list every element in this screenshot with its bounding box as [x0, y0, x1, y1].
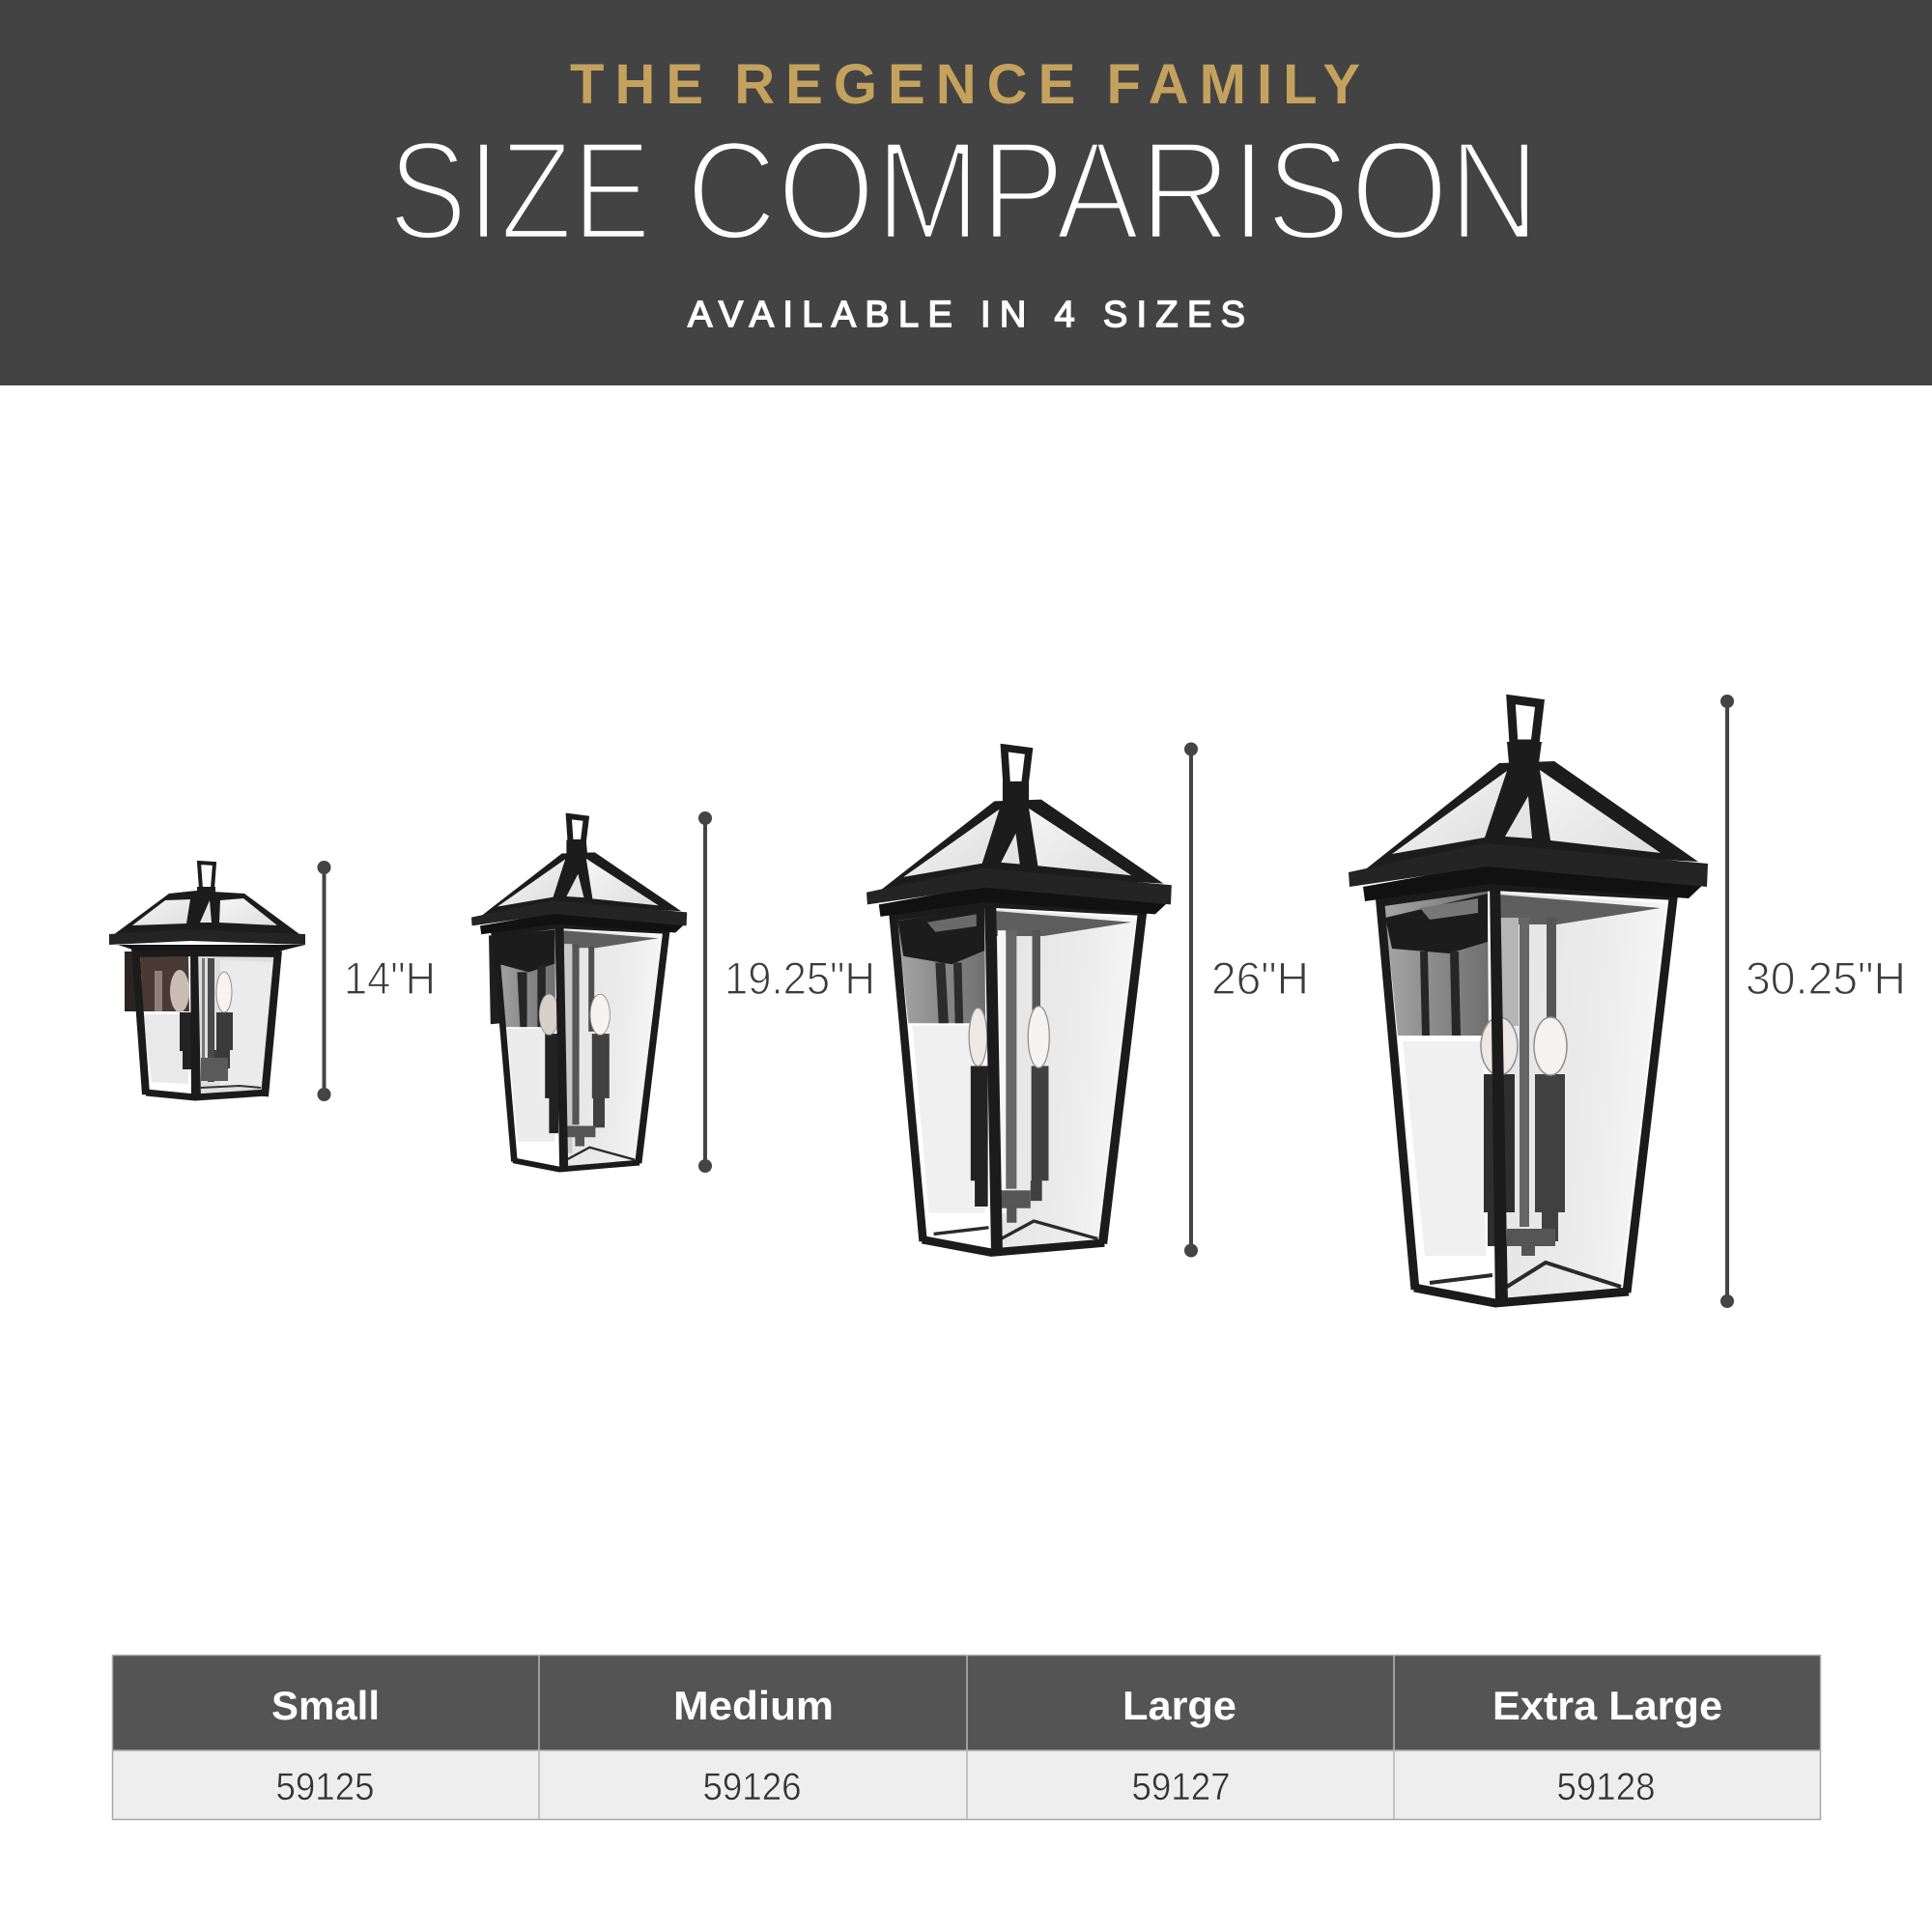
table: model numbers by size [112, 1655, 1821, 1820]
candle left [180, 1012, 191, 1069]
body frame [135, 949, 146, 1094]
lantern: small 14 inch [109, 863, 305, 1100]
finial loop [569, 816, 586, 842]
finial loop [1511, 699, 1540, 744]
roof [1363, 761, 1698, 871]
eave band [109, 929, 305, 945]
eave band [1349, 843, 1708, 887]
floor lines [566, 1148, 635, 1160]
under-eave [480, 913, 687, 934]
right glass pane [1499, 893, 1666, 1299]
left glass pane [898, 910, 988, 1238]
subheading: available in 4 sizes: AVAILABLE IN 4 SIZES [688, 295, 1245, 335]
header: medium: Medium [673, 1683, 834, 1728]
candle left [1484, 1074, 1515, 1246]
left glass pane [140, 954, 191, 1092]
left glass pane [494, 930, 557, 1160]
panel: header banner [0, 0, 1932, 385]
roof glass left [497, 859, 565, 907]
candle right [214, 1012, 233, 1068]
backplate [489, 935, 504, 1024]
roof glass right [1540, 770, 1661, 853]
roof [113, 891, 299, 935]
bulb right [1028, 1007, 1049, 1067]
header: small: Small [271, 1683, 380, 1728]
base hub [1001, 1190, 1031, 1208]
candle left [971, 1066, 988, 1207]
title: size comparison: SIZE [388, 112, 651, 269]
label: 30.25"H: 30.25"H [1746, 952, 1906, 1004]
cell: 59127: 59127 [1132, 1766, 1231, 1808]
internal bars [1520, 918, 1529, 1227]
base hub [201, 1058, 228, 1081]
roof glass right [586, 859, 659, 905]
finial loop [1005, 748, 1029, 785]
dimension: medium height [698, 811, 875, 1173]
base hub [1507, 1229, 1555, 1246]
header: large: Large [1122, 1683, 1236, 1728]
title: size comparison: COMPARISON [686, 112, 1540, 269]
backplate [125, 952, 141, 1011]
right glass pane [562, 929, 662, 1167]
internal bars [572, 944, 580, 1124]
lantern: medium 19.25 inch [471, 816, 687, 1172]
candle left [545, 1034, 558, 1133]
roof glass left [1392, 771, 1507, 854]
roof glass right [219, 898, 277, 925]
bulb left [1481, 1017, 1518, 1075]
title: size comparison [388, 112, 1540, 269]
candle right [1535, 1074, 1565, 1241]
floor lines [1507, 1263, 1621, 1287]
roof glass left [132, 899, 190, 925]
finial loop [199, 863, 214, 889]
roof [480, 852, 681, 917]
bulb right [216, 972, 232, 1012]
under-eave [879, 886, 1171, 917]
label: 26"H: 26"H [1211, 952, 1309, 1004]
right glass pane [197, 954, 276, 1094]
bulb left [969, 1008, 987, 1066]
candle right [1031, 1066, 1048, 1201]
roof [879, 800, 1163, 892]
roof glass right [1029, 809, 1131, 875]
eave band [867, 868, 1172, 904]
roof middle glass [566, 874, 583, 897]
floor lines [1001, 1221, 1097, 1238]
bulb right [1534, 1017, 1567, 1075]
right glass pane [994, 909, 1136, 1249]
roof glass left [903, 810, 1000, 877]
candle right [592, 1034, 610, 1127]
lantern: large 26 inch [867, 748, 1172, 1256]
body frame [1379, 894, 1415, 1290]
internal bars [202, 958, 205, 1079]
body frame [495, 930, 514, 1161]
body frame [893, 910, 923, 1241]
bulb right [590, 994, 610, 1035]
under-eave [1363, 865, 1707, 901]
roof middle glass [1001, 834, 1020, 865]
base hub [566, 1126, 595, 1137]
left glass pane [1386, 894, 1492, 1287]
dimension: extra large height [1720, 695, 1906, 1308]
bulb left [539, 994, 559, 1035]
eave band [471, 900, 687, 925]
roof middle glass [1505, 796, 1532, 838]
dimension: large height [1184, 742, 1309, 1258]
under-eave [118, 945, 305, 951]
label: 19.25"H: 19.25"H [724, 952, 875, 1004]
cell: 59125: 59125 [276, 1766, 375, 1808]
header: extra large: Extra Large [1492, 1683, 1722, 1728]
cell: 59126: 59126 [703, 1766, 802, 1808]
dimension: small height [317, 861, 436, 1101]
lantern: extra large 30.25 inch [1349, 699, 1708, 1307]
cell: 59128: 59128 [1557, 1766, 1656, 1808]
internal bars [1006, 930, 1016, 1189]
heading: the regence family: THE REGENCE FAMILY [570, 53, 1360, 116]
roof middle glass [200, 900, 212, 923]
label: 14"H: 14"H [344, 952, 436, 1004]
